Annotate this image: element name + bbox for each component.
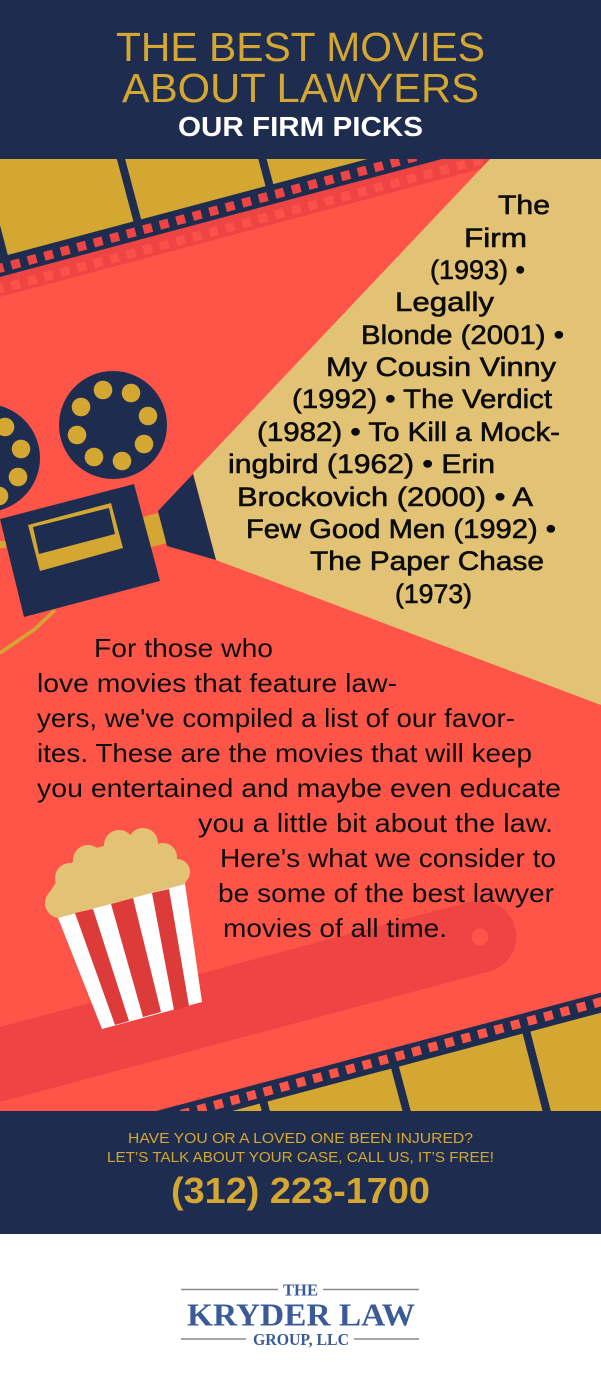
text block: movie list [228,190,564,609]
camera screen [28,503,123,571]
panel: call to action [0,1111,601,1234]
call to action text [107,1130,494,1166]
text block: movie list: ingbird (1962) • Erin [228,449,495,479]
rear connector [0,541,6,548]
text block: movie list: (1973) [395,579,472,609]
text block: movie list: Brockovich (2000) • A [237,482,533,512]
camera cord [0,610,55,653]
reel right [59,371,167,479]
text block: movie list: My Cousin Vinny [326,352,557,382]
text block: introduction: be some of the best lawyer [218,878,554,908]
text block: introduction: you a little bit about the law. [198,808,553,838]
top film strip [0,159,490,297]
panel: film scene background [0,159,601,1111]
text block: introduction: ites. These are the movies that will keep [37,738,532,768]
text block: introduction: love movies that feature law- [37,668,397,698]
text block: introduction: Here's what we consider to [220,843,556,873]
call to action text: HAVE YOU OR A LOVED ONE BEEN INJURED? [128,1130,473,1147]
text block: movie list: Few Good Men (1992) • [246,514,556,544]
title [116,24,485,111]
icon: popcorn [45,828,202,1029]
text block: movie list: The [498,190,550,220]
title: ABOUT LAWYERS [122,65,479,111]
text block: movie list: Firm [464,223,527,253]
text block: movie list: Blonde (2001) • [361,320,564,350]
text block: movie list: (1982) • To Kill a Mock- [257,417,560,447]
text block: movie list: (1992) • The Verdict [292,384,553,414]
light beam [193,159,601,705]
text block: movie list: The Paper Chase [310,546,544,576]
logo: The Kryder Law Group: KRYDER LAW [187,1296,415,1332]
panel: header [0,0,601,159]
call to action text: LET’S TALK ABOUT YOUR CASE, CALL US, IT’S FREE! [107,1149,494,1166]
text block: movie list: (1993) • [430,255,525,285]
text block: introduction: you entertained and maybe even educate [37,773,561,803]
popcorn kernels [45,828,190,918]
bottom film strip [156,992,601,1111]
popcorn tub [58,884,202,1029]
lens connector [143,513,167,547]
text block: introduction: movies of all time. [223,913,447,943]
text block: introduction: yers, we've compiled a list of our favor- [37,703,515,733]
lens [158,474,216,560]
logo: The Kryder Law Group [181,1280,419,1349]
camera body [0,484,160,617]
panel: logo footer [0,1234,601,1398]
text block: introduction: For those who [94,633,273,663]
logo: The Kryder Law Group: THE [283,1280,318,1300]
logo: The Kryder Law Group: GROUP, LLC [253,1330,349,1349]
subtitle: OUR FIRM PICKS [178,111,423,142]
text block: introduction [37,633,561,943]
title: THE BEST MOVIES [116,24,485,70]
decorative pill [0,928,488,1078]
reel left [0,404,40,512]
phone number: (312) 223-1700 [171,1170,430,1211]
text block: movie list: Legally [395,287,495,317]
icon: movie camera [0,371,216,653]
